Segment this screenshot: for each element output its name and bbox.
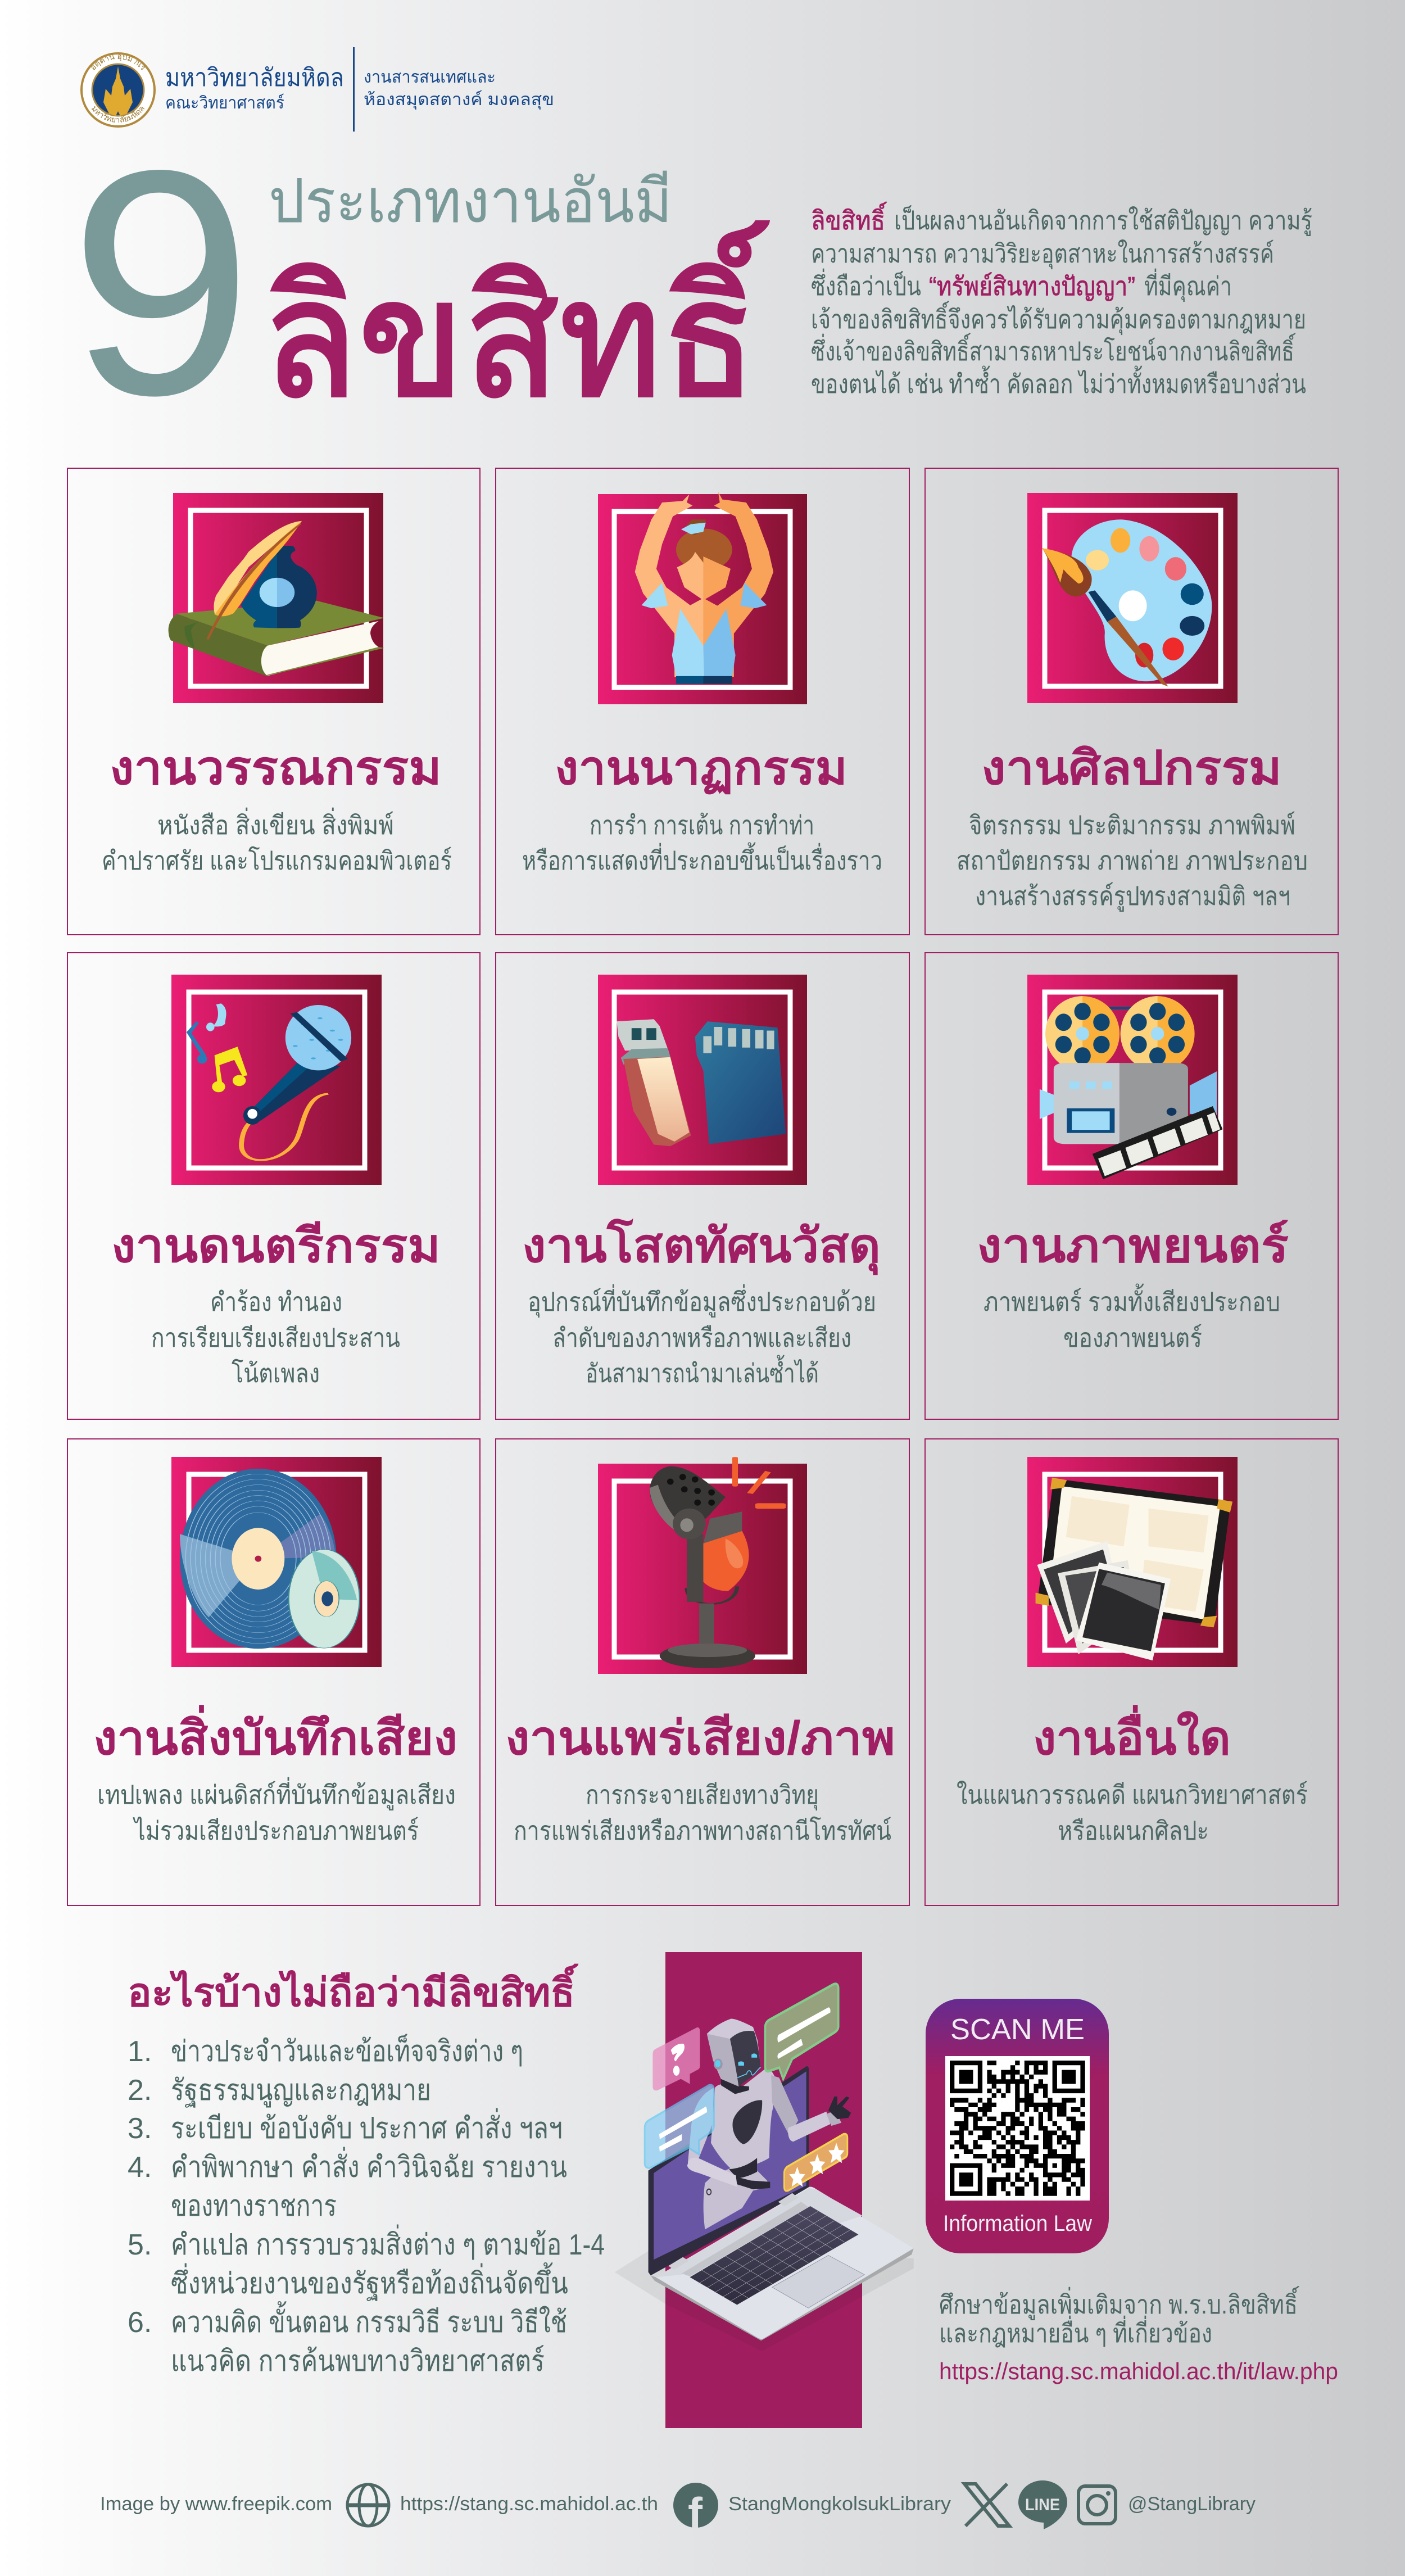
description: คำปราศรัย และโปรแกรมคอมพิวเตอร์	[102, 846, 452, 875]
university name	[165, 64, 344, 112]
description: ของภาพยนตร์	[1063, 1323, 1202, 1352]
description: การแพร่เสียงหรือภาพทางสถานีโทรทัศน์	[514, 1816, 891, 1845]
header logos	[80, 47, 554, 132]
university name: คณะวิทยาศาสตร์	[165, 93, 284, 112]
panel: musical works	[67, 953, 480, 1419]
QR label top: SCAN ME	[950, 2013, 1085, 2046]
heading: งานโสตทัศนวัสดุ	[522, 1219, 881, 1275]
description: ภาพยนตร์ รวมทั้งเสียงประกอบ	[984, 1283, 1280, 1316]
description: ในแผนกวรรณคดี แผนกวิทยาศาสตร์	[957, 1780, 1308, 1809]
panel: other works	[925, 1439, 1338, 1905]
numbered list: 5.	[128, 2229, 152, 2261]
numbered list: 2.	[128, 2074, 152, 2107]
numbered list: ข่าวประจำวันและข้อเท็จจริงต่าง ๆ	[171, 2034, 523, 2068]
icon: photo album	[1036, 1478, 1232, 1660]
description	[151, 1287, 400, 1388]
panel: broadcasting works	[496, 1439, 909, 1905]
icon: facebook: f	[688, 2488, 703, 2538]
description	[514, 1780, 891, 1845]
panel: literary works	[67, 468, 480, 935]
intro paragraph: เจ้าของลิขสิทธิ์จึงควรได้รับความคุ้มครองตามกฎหมาย	[811, 301, 1306, 336]
numbered list: ระเบียบ ข้อบังคับ ประกาศ คำสั่ง ฯลฯ	[171, 2108, 563, 2145]
icon: university seal: มหาวิทยาลัยมหิดล	[92, 106, 145, 123]
panel: audiovisual works	[496, 953, 909, 1419]
library name: งานสารสนเทศและ	[364, 68, 496, 87]
university name: มหาวิทยาลัยมหิดล	[165, 64, 344, 92]
panel: cinematographic works	[925, 953, 1338, 1419]
icon: palette and brush	[1042, 519, 1212, 687]
description	[957, 1780, 1308, 1845]
description: การเรียบเรียงเสียงประสาน	[151, 1323, 400, 1352]
instagram handle: @StangLibrary	[1128, 2493, 1256, 2515]
numbered list: ความคิด ขั้นตอน กรรมวิธี ระบบ วิธีใช้	[171, 2301, 567, 2339]
big number 9: 9	[69, 103, 253, 461]
numbered list	[128, 2034, 605, 2378]
description: งานสร้างสรรค์รูปทรงสามมิติ ฯลฯ	[975, 881, 1290, 912]
title	[69, 103, 768, 461]
description	[528, 1284, 876, 1388]
intro paragraph: ลิขสิทธิ์	[811, 202, 887, 235]
description	[957, 811, 1308, 912]
QR code	[945, 2056, 1090, 2201]
image credit: Image by www.freepik.com	[100, 2493, 332, 2515]
title line one: ประเภทงานอันมี	[269, 167, 672, 235]
icon: facebook	[673, 2483, 718, 2538]
description: เทปเพลง แผ่นดิสก์ที่บันทึกข้อมูลเสียง	[97, 1777, 456, 1810]
icon: USB drive and SD card	[617, 1019, 786, 1146]
numbered list: 1.	[128, 2035, 152, 2068]
section: not copyrightable	[128, 1964, 605, 2378]
numbered list: ซึ่งหน่วยงานของรัฐหรือท้องถิ่นจัดขึ้น	[171, 2262, 568, 2301]
robot in laptop	[615, 1984, 914, 2351]
panel: sound recordings	[67, 1439, 480, 1905]
icon: film projector	[1040, 996, 1223, 1179]
heading: งานศิลปกรรม	[981, 741, 1282, 794]
description: อันสามารถนำมาเล่นซ้ำได้	[586, 1355, 819, 1388]
title line two: ลิขสิทธิ์	[262, 221, 768, 431]
description: หรือแผนกศิลปะ	[1058, 1816, 1209, 1845]
icon: LINE	[1018, 2480, 1067, 2529]
description: จิตรกรรม ประติมากรรม ภาพพิมพ์	[969, 811, 1295, 840]
intro paragraph: ซึ่งถือว่าเป็น	[811, 268, 921, 301]
QR label bottom: Information Law	[943, 2211, 1092, 2236]
description: ลำดับของภาพหรือภาพและเสียง	[552, 1323, 851, 1352]
icon: university seal	[80, 52, 156, 128]
description: การกระจายเสียงทางวิทยุ	[586, 1780, 819, 1811]
icon: university seal: อตฺตานํ อุปมํ กเร	[91, 53, 145, 70]
intro paragraph: “ทรัพย์สินทางปัญญา”	[929, 271, 1135, 301]
heading: งานดนตรีกรรม	[111, 1219, 441, 1272]
numbered list: 4.	[128, 2151, 152, 2184]
icon: Instagram	[1078, 2486, 1116, 2524]
description: โน้ตเพลง	[232, 1359, 320, 1388]
description: หนังสือ สิ่งเขียน สิ่งพิมพ์	[157, 807, 394, 840]
icon: globe	[347, 2484, 389, 2526]
description	[984, 1283, 1280, 1352]
numbered list: คำพิพากษา คำสั่ง คำวินิจฉัย รายงาน	[171, 2147, 567, 2184]
further reading note: และกฎหมายอื่น ๆ ที่เกี่ยวข้อง	[939, 2315, 1212, 2348]
icon: broadcast microphone	[650, 1457, 786, 1668]
description	[102, 807, 452, 875]
library name	[364, 68, 554, 110]
further reading note	[939, 2286, 1338, 2384]
description: คำร้อง ทำนอง	[210, 1287, 342, 1316]
description: การรำ การเต้น การทำท่า	[590, 811, 814, 840]
icon: microphone and notes	[187, 1003, 351, 1160]
numbered list: 3.	[128, 2112, 152, 2145]
further reading note: ศึกษาข้อมูลเพิ่มเติมจาก พ.ร.บ.ลิขสิทธิ์	[939, 2286, 1299, 2320]
website: https://stang.sc.mahidol.ac.th	[400, 2493, 658, 2515]
QR card	[926, 1999, 1109, 2253]
library name: ห้องสมุดสตางค์ มงคลสุข	[364, 90, 554, 110]
intro paragraph: เป็นผลงานอันเกิดจากการใช้สติปัญญา ความรู้	[894, 205, 1312, 236]
heading: งานสิ่งบันทึกเสียง	[93, 1705, 457, 1764]
numbered list: ของทางราชการ	[171, 2190, 337, 2222]
description: อุปกรณ์ที่บันทึกข้อมูลซึ่งประกอบด้วย	[528, 1284, 876, 1318]
URL: https://stang.sc.mahidol.ac.th/it/law.php	[939, 2358, 1338, 2384]
numbered list: รัฐธรรมนูญและกฎหมาย	[171, 2074, 431, 2108]
robot and laptop illustration	[615, 1952, 914, 2428]
description	[522, 811, 882, 875]
numbered list: คำแปล การรวบรวมสิ่งต่าง ๆ ตามข้อ 1-4	[171, 2224, 605, 2261]
panel: dramatic works	[496, 468, 909, 935]
icon: X	[964, 2484, 1009, 2526]
heading: งานแพร่เสียง/ภาพ	[505, 1712, 895, 1764]
intro paragraph: ของตนได้ เช่น ทำซ้ำ คัดลอก ไม่ว่าทั้งหมดหรือบางส่วน	[811, 365, 1306, 399]
description: ไม่รวมเสียงประกอบภาพยนตร์	[133, 1816, 419, 1845]
heading: งานภาพยนตร์	[977, 1219, 1289, 1272]
numbered list: แนวคิด การค้นพบทางวิทยาศาสตร์	[171, 2345, 545, 2378]
intro paragraph: ความสามารถ ความวิริยะอุตสาหะในการสร้างสรรค์	[811, 239, 1274, 270]
footer	[100, 2480, 1256, 2538]
icon: ballerina	[635, 492, 773, 684]
heading: อะไรบ้างไม่ถือว่ามีลิขสิทธิ์	[128, 1964, 579, 2014]
intro paragraph	[811, 202, 1312, 399]
icon: LINE: LINE	[1025, 2496, 1060, 2514]
robot pelvis	[704, 2161, 769, 2230]
description	[97, 1777, 456, 1845]
icon: book and quill	[169, 521, 384, 676]
panel: artistic works	[925, 468, 1338, 935]
intro paragraph: ที่มีคุณค่า	[1144, 268, 1232, 302]
heading: งานอื่นใด	[1033, 1705, 1231, 1764]
icon: vinyl record and CD	[180, 1469, 360, 1649]
description: สถาปัตยกรรม ภาพถ่าย ภาพประกอบ	[957, 846, 1308, 875]
heading: งานนาฏกรรม	[555, 741, 847, 795]
facebook name: StangMongkolsukLibrary	[728, 2493, 951, 2515]
heading: งานวรรณกรรม	[110, 741, 442, 794]
intro paragraph: ซึ่งเจ้าของลิขสิทธิ์สามารถหาประโยชน์จากงานลิขสิทธิ์	[811, 333, 1296, 366]
numbered list: 6.	[128, 2306, 152, 2339]
description: หรือการแสดงที่ประกอบขึ้นเป็นเรื่องราว	[522, 842, 882, 875]
